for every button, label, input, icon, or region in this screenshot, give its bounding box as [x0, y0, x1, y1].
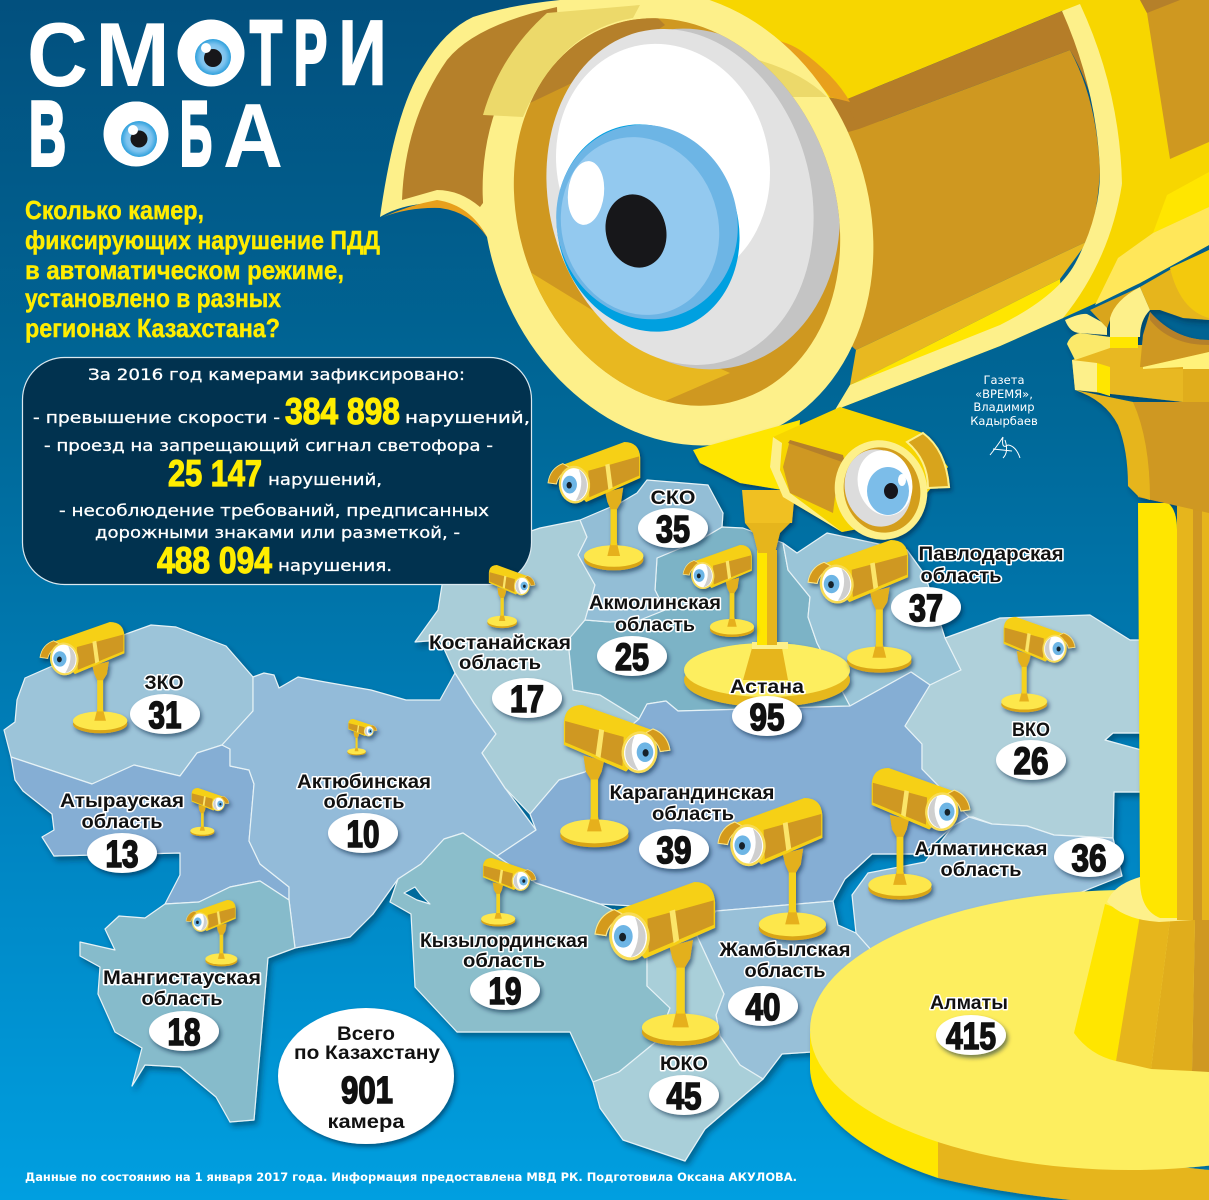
info panel	[22, 358, 532, 584]
label: Кызылординская: 19	[488, 971, 522, 1013]
heading: в оба: Б	[180, 84, 212, 185]
region: Атырауская	[11, 745, 289, 904]
heading: в оба: В	[29, 84, 66, 185]
Astana pole	[742, 490, 795, 680]
Astana camera	[684, 407, 949, 707]
camera gold panel	[800, 50, 1100, 350]
info panel: нарушений,	[268, 470, 382, 489]
subtitle: регионах Казахстана?	[25, 313, 280, 343]
label: Павлодарская: область	[920, 566, 1002, 587]
label: Алматинская	[914, 837, 1124, 881]
camera: ЗКО	[40, 622, 127, 733]
label: Актюбинская: область	[324, 792, 404, 813]
region: СКО	[578, 480, 723, 622]
label: Кызылординская: Кызылординская	[420, 931, 588, 952]
label: Жамбылская: 40	[746, 987, 780, 1029]
label: Мангистауская	[103, 968, 261, 1054]
label: Кызылординская: область	[463, 951, 545, 972]
label: Атырауская: Атырауская	[60, 791, 184, 812]
label: Акмолинская: область	[615, 615, 695, 636]
label: Актюбинская	[297, 772, 431, 856]
camera: СКО	[548, 442, 643, 570]
heading: в оба: О	[106, 84, 166, 185]
camera ring	[420, 0, 936, 501]
info panel: - проезд на запрещающий сигнал светофора -	[44, 436, 493, 455]
heading: Смотри: И	[339, 3, 386, 104]
label: Астана: 95	[750, 697, 784, 739]
region: Акмолинская	[568, 527, 850, 719]
camera far body	[1060, 0, 1209, 318]
region: ЮКО	[593, 925, 763, 1161]
label: Алматы: 415	[946, 1016, 996, 1058]
region: ВКО	[905, 615, 1145, 838]
label: ЮКО: ЮКО	[660, 1054, 708, 1075]
heading: Смотри: С	[27, 5, 88, 106]
heading: в оба: А	[223, 86, 283, 187]
icon: eye in title 1	[178, 20, 244, 86]
camera inner shading	[530, 18, 840, 401]
label: Мангистауская: Мангистауская	[103, 968, 261, 989]
label: Мангистауская: 18	[168, 1012, 200, 1054]
subtitle: установлено в разных	[25, 283, 281, 313]
lake: Aral	[404, 887, 430, 904]
subtitle: фиксирующих нарушение ПДД	[25, 225, 380, 255]
region: Карагандинская	[497, 672, 969, 911]
label: Костанайская: 17	[510, 679, 544, 721]
heading: Смотри	[27, 3, 386, 106]
Astana arm	[693, 420, 800, 492]
region: Мангистауская	[80, 881, 295, 1122]
label: Карагандинская: 39	[656, 830, 692, 872]
camera body arc	[697, 38, 850, 102]
total callout	[278, 1008, 454, 1144]
label: Актюбинская: Актюбинская	[297, 772, 431, 793]
Astana lens	[824, 430, 938, 550]
region: Актюбинская	[222, 673, 536, 948]
region: Жамбылская	[697, 901, 900, 1079]
credit: «ВРЕМЯ»,	[975, 387, 1033, 401]
label: Акмолинская: 25	[615, 637, 649, 679]
region: Кызылординская	[390, 833, 670, 1082]
label: Карагандинская: область	[652, 804, 734, 825]
Astana body	[770, 407, 948, 532]
eye highlight	[568, 161, 604, 225]
label: ЗКО	[130, 673, 200, 737]
label: Жамбылская: Жамбылская	[718, 940, 850, 961]
label: Карагандинская	[610, 783, 774, 872]
label: Павлодарская	[891, 544, 1064, 630]
info panel: дорожными знаками или разметкой, -	[95, 523, 460, 542]
camera body bottom strip	[850, 241, 1088, 385]
region: Костанайская	[415, 520, 639, 814]
camera: ВКО	[1001, 617, 1075, 712]
total callout: 901	[341, 1070, 393, 1112]
total callout: по Казахстану	[294, 1043, 440, 1064]
camera back band	[835, 4, 1122, 410]
region: ЗКО	[4, 625, 253, 784]
stand rim	[810, 1033, 1209, 1200]
label: СКО	[638, 488, 708, 551]
stand pole lower	[1138, 503, 1209, 920]
label: ВКО: 26	[1014, 741, 1048, 783]
eyeball	[546, 28, 840, 370]
label: Жамбылская: область	[744, 961, 826, 982]
info panel: 25 147	[168, 453, 262, 494]
icon: signature	[990, 437, 1020, 458]
label: Павлодарская: 37	[909, 588, 943, 630]
info panel: 488 094	[157, 540, 272, 581]
icon: eye in title 2	[104, 102, 168, 166]
camera body underlay	[790, 60, 880, 300]
credit: Газета	[984, 373, 1024, 387]
label: СКО: 35	[656, 509, 690, 551]
camera: Алматинская	[868, 768, 970, 900]
camera: Жамбылская	[718, 798, 826, 940]
label: Костанайская: область	[459, 653, 541, 674]
label: Алматинская: 36	[1072, 838, 1106, 880]
label: Костанайская: Костанайская	[429, 633, 571, 654]
camera: Кызылординская	[481, 858, 536, 926]
label: Астана: Астана	[730, 677, 804, 698]
label: Астана	[730, 677, 804, 739]
camera: Карагандинская	[560, 705, 670, 847]
camera inner	[461, 0, 893, 452]
iris	[556, 124, 740, 332]
label: СКО: СКО	[650, 488, 696, 509]
credit: Кадырбаев	[970, 414, 1038, 428]
Astana base	[684, 643, 850, 707]
label: Мангистауская: область	[142, 989, 222, 1010]
subtitle: Сколько камер,	[25, 195, 204, 225]
map of Kazakhstan	[4, 480, 1145, 1161]
camera: Актюбинская	[347, 719, 377, 755]
subtitle: в автоматическом режиме,	[25, 255, 344, 285]
footer source note: Данные по состоянию на 1 января 2017 года. Информация предоставлена МВД РК. Подготовила Оксана АКУЛОВА.	[25, 1170, 797, 1184]
subtitle	[25, 195, 380, 343]
info panel: - несоблюдение требований, предписанных	[59, 501, 489, 520]
credit	[970, 373, 1038, 458]
small cameras	[40, 442, 1075, 1046]
label: Алматинская: Алматинская	[914, 839, 1048, 860]
info panel: нарушений,	[405, 408, 530, 427]
label: Павлодарская: Павлодарская	[918, 544, 1064, 565]
label: ЗКО: 31	[148, 695, 182, 737]
label: Жамбылская	[718, 940, 850, 1029]
pupil	[606, 194, 666, 268]
total callout: камера	[328, 1112, 405, 1133]
label: Костанайская	[429, 633, 571, 721]
label: ЗКО: ЗКО	[144, 673, 184, 694]
info panel: За 2016 год камерами зафиксировано:	[88, 365, 465, 384]
label: ВКО: ВКО	[1012, 720, 1050, 741]
heading: Смотри: М	[95, 5, 170, 106]
camera brown panel	[845, 11, 1100, 129]
info panel: нарушения.	[278, 556, 392, 575]
label: Карагандинская: Карагандинская	[610, 783, 774, 804]
label: Алматы	[930, 993, 1008, 1058]
label: ВКО	[996, 720, 1066, 783]
label: Кызылординская	[420, 931, 588, 1013]
large camera with eye	[380, 0, 1209, 446]
label: ЮКО: 45	[666, 1076, 702, 1118]
stand column	[1133, 402, 1209, 513]
camera: Костанайская	[487, 565, 535, 628]
title	[27, 3, 386, 187]
heading: Смотри: О	[181, 3, 241, 104]
heading: Смотри: Р	[294, 3, 327, 104]
label: Акмолинская: Акмолинская	[589, 593, 721, 614]
stand collar	[1107, 877, 1209, 922]
camera body top	[673, 0, 1082, 100]
camera body bottom yellow	[835, 279, 1063, 410]
credit: Владимир	[973, 400, 1035, 414]
info panel: - превышение скорости -	[33, 408, 280, 427]
region: Павлодарская	[783, 533, 961, 706]
heading: в оба	[29, 84, 283, 187]
Astana hood	[907, 433, 949, 488]
camera: Мангистауская	[186, 900, 237, 966]
stand base	[810, 890, 1209, 1170]
label: ЮКО	[649, 1054, 719, 1118]
large camera stand	[810, 250, 1209, 1200]
label: Алматы: Алматы	[930, 993, 1008, 1014]
camera: ЮКО	[595, 882, 719, 1046]
total callout: Всего	[337, 1024, 395, 1045]
camera ring shaded top	[483, 5, 827, 117]
label: Актюбинская: 10	[346, 814, 380, 856]
label: Акмолинская	[589, 593, 721, 679]
stand head	[1065, 250, 1209, 402]
label: Атырауская: 13	[106, 834, 138, 876]
region: Алматинская	[852, 817, 1122, 1000]
camera hood	[380, 0, 640, 237]
info panel: 384 898	[285, 391, 400, 432]
camera: Атырауская	[190, 788, 229, 836]
label: Атырауская: область	[82, 812, 162, 833]
camera: Акмолинская	[683, 545, 754, 637]
heading: Смотри: Т	[250, 3, 282, 104]
camera: Павлодарская	[808, 540, 912, 673]
label: Алматинская: область	[940, 860, 1022, 881]
stand column curve	[1075, 390, 1150, 500]
stand cone	[1074, 904, 1209, 1072]
label: Атырауская	[60, 791, 184, 876]
